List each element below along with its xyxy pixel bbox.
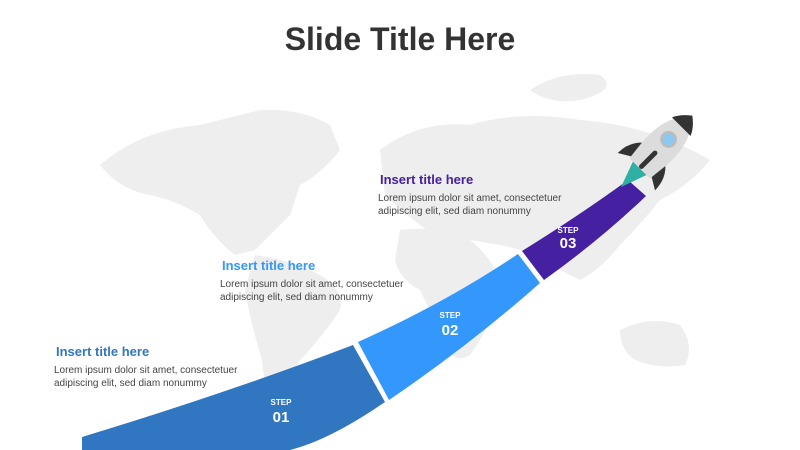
step labels: 02	[442, 322, 458, 339]
step labels: 03	[560, 235, 576, 252]
text block: step 2: Lorem ipsum dolor sit amet, consectetuer adipiscing elit, sed diam nonummy	[220, 279, 403, 303]
icon: rocket	[602, 97, 711, 206]
step labels: 01	[273, 409, 289, 426]
text block: step 2	[220, 258, 404, 303]
title: Slide Title Here	[285, 21, 515, 57]
step labels: STEP	[558, 226, 579, 235]
text block: step 1: Insert title here	[56, 344, 149, 359]
text block: step 3: Insert title here	[380, 172, 473, 187]
text block: step 3	[378, 172, 562, 217]
text block: step 3: Lorem ipsum dolor sit amet, consectetuer adipiscing elit, sed diam nonummy	[378, 193, 561, 217]
ribbon step 03	[522, 180, 646, 280]
text block: step 2: Insert title here	[222, 258, 315, 273]
text block: step 1	[54, 344, 238, 389]
text block: step 1: Lorem ipsum dolor sit amet, consectetuer adipiscing elit, sed diam nonummy	[54, 365, 237, 389]
step labels: STEP	[440, 311, 461, 320]
ribbon step 02	[358, 254, 540, 400]
step labels	[271, 226, 579, 426]
step labels: STEP	[271, 398, 292, 407]
ribbon step 01	[82, 345, 385, 450]
